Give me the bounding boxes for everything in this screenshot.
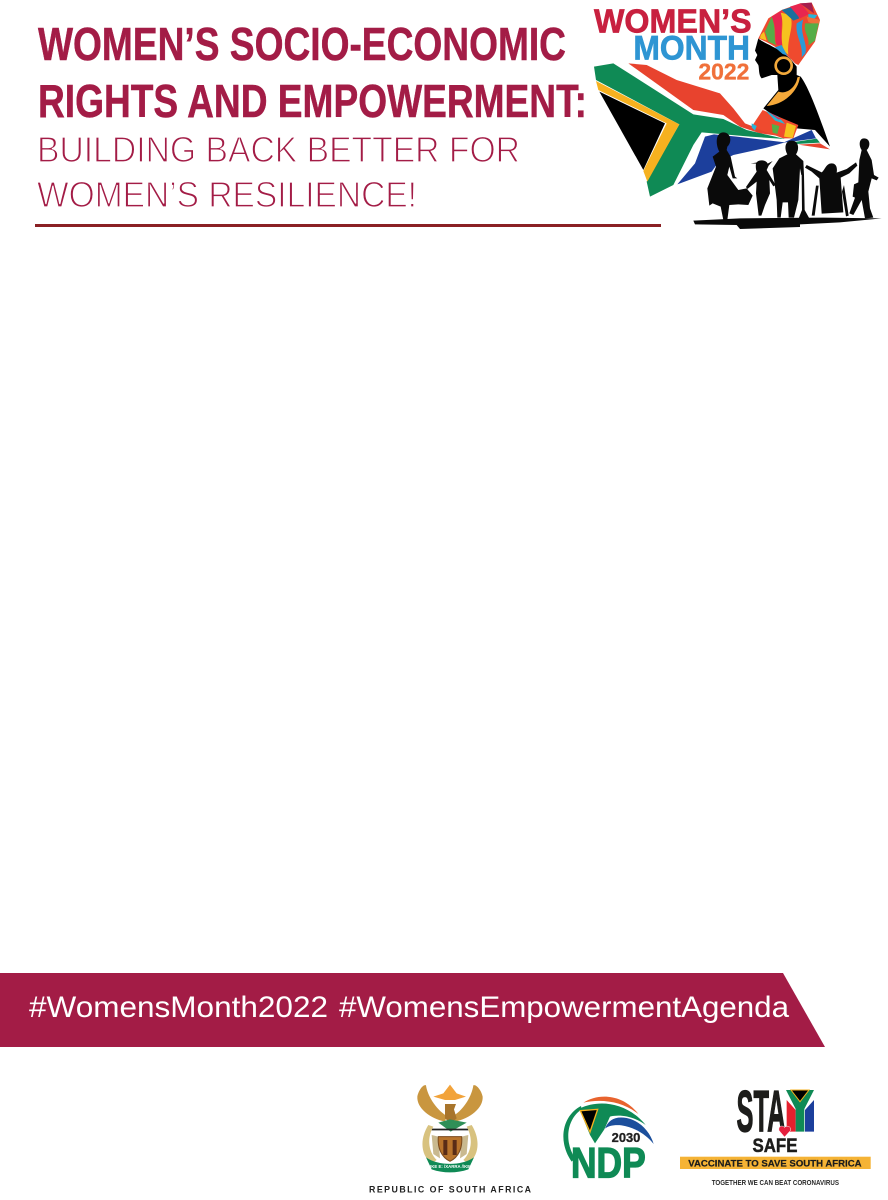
flag Y xyxy=(786,1090,814,1132)
woman silhouette with head wrap xyxy=(752,3,830,149)
hashtags: #WomensMonth2022 xyxy=(29,991,328,1024)
header rule xyxy=(35,224,661,227)
NDP emblem: NDP xyxy=(571,1139,646,1187)
logo: coat of arms xyxy=(369,1085,532,1194)
hashtags: #WomensEmpowermentAgenda xyxy=(339,991,789,1024)
logo wordmark: WOMEN’S xyxy=(594,4,752,41)
crest caption: REPUBLIC OF SOUTH AFRICA xyxy=(369,1184,532,1194)
logo wordmark xyxy=(594,4,752,84)
NDP emblem: 2030 xyxy=(612,1131,640,1145)
tagline: TOGETHER WE CAN BEAT CORONAVIRUS xyxy=(712,1180,839,1187)
title block xyxy=(37,18,587,215)
figure: girl xyxy=(746,160,776,216)
logo: Stay Safe xyxy=(680,1080,871,1187)
logo: NDP 2030 xyxy=(563,1097,654,1187)
logo: Women's Month 2022 xyxy=(594,3,882,229)
flag ribbon xyxy=(594,63,785,197)
heading: bold title: WOMEN’S SOCIO-ECONOMIC xyxy=(38,18,566,70)
subheading: light title xyxy=(37,129,520,215)
crest artwork: !KE E: /XARRA //KE xyxy=(430,1164,470,1169)
figure: child in wheelchair xyxy=(805,162,857,214)
hashtags xyxy=(29,991,789,1024)
subheading: light title: BUILDING BACK BETTER FOR xyxy=(37,129,520,170)
figure: person with crutch xyxy=(773,141,804,218)
vaccinate bar: VACCINATE TO SAVE SOUTH AFRICA xyxy=(688,1158,862,1168)
figure: adult walking xyxy=(849,138,879,218)
crest artwork xyxy=(417,1085,483,1172)
ground shadow xyxy=(693,218,882,229)
hashtag banner xyxy=(0,973,825,1047)
banner shape xyxy=(0,973,825,1047)
logo wordmark: 2022 xyxy=(698,58,749,84)
figure: woman in dress xyxy=(707,132,753,220)
subheading: light title: WOMEN’S RESILIENCE! xyxy=(37,174,417,215)
logo wordmark: MONTH xyxy=(633,29,750,67)
NDP emblem xyxy=(563,1097,654,1187)
heading: bold title: RIGHTS AND EMPOWERMENT: xyxy=(38,75,587,127)
heart xyxy=(779,1126,791,1137)
family silhouettes xyxy=(693,132,882,229)
vaccinate bar xyxy=(680,1157,871,1169)
heading: bold title xyxy=(38,18,587,127)
SAFE lettering: SAFE xyxy=(752,1135,798,1157)
logo: Stay Safe: STA xyxy=(736,1080,786,1144)
